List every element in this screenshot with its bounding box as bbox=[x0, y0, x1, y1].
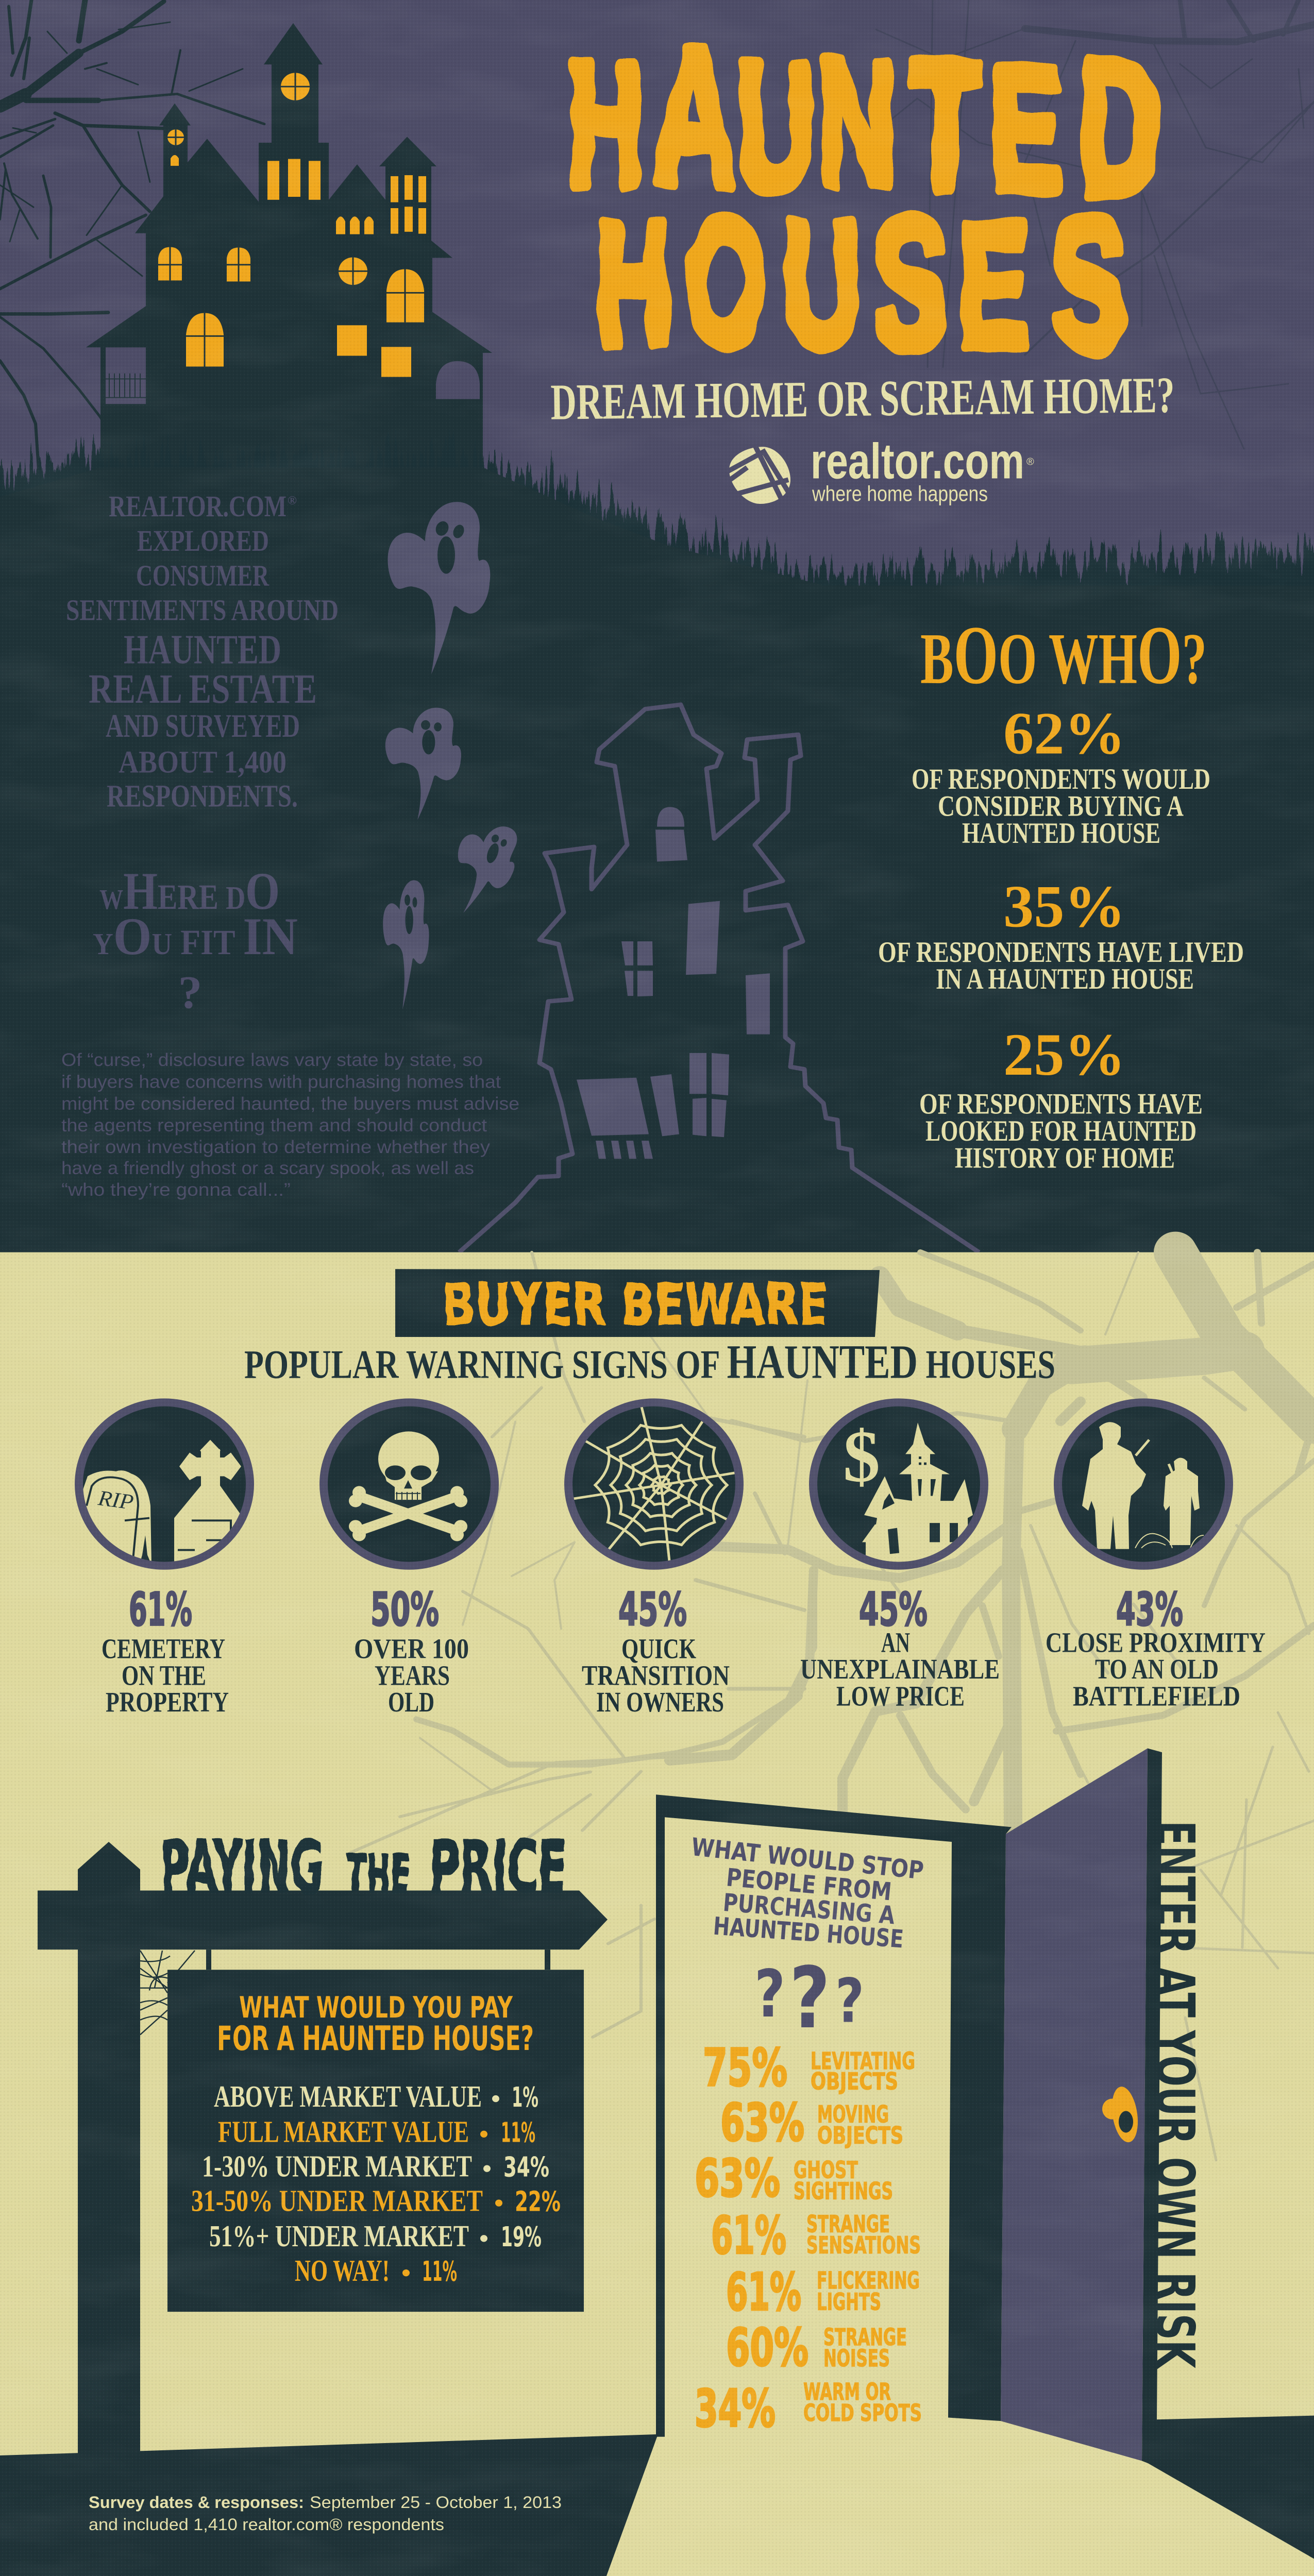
label: an unexplainable low price: UNEXPLAINABLE bbox=[800, 1653, 1000, 1685]
intro text block: HAUNTED bbox=[124, 626, 281, 672]
reason: warm or cold spots: 34% bbox=[695, 2379, 776, 2439]
open door scene bbox=[607, 1749, 1314, 2576]
disclosure paragraph: their own investigation to determine whether they bbox=[61, 1137, 490, 1157]
intro text block: AND SURVEYED bbox=[106, 707, 300, 743]
title: D bbox=[1079, 18, 1161, 234]
reason: strange noises: NOISES bbox=[823, 2345, 890, 2372]
board heading: WHAT WOULD YOU PAY bbox=[239, 1990, 513, 2025]
label: cemetery on the property bbox=[102, 1633, 229, 1718]
realtor.com logo: where home happens bbox=[812, 482, 988, 506]
door knob bbox=[1102, 2085, 1141, 2144]
label: an unexplainable low price bbox=[800, 1626, 1000, 1712]
door leaf bbox=[1001, 1749, 1148, 2461]
question: where do you fit in bbox=[93, 861, 298, 1018]
intro text block: ® bbox=[288, 494, 297, 507]
price option rows: 11% bbox=[422, 2255, 457, 2287]
icon: cemetery: RIP bbox=[96, 1486, 135, 1514]
warning sign: cemetery bbox=[77, 1402, 252, 1718]
stat: 25 percent: LOOKED FOR HAUNTED bbox=[925, 1114, 1197, 1147]
label: cemetery on the property: PROPERTY bbox=[106, 1686, 229, 1718]
reason: strange sensations: STRANGE bbox=[806, 2210, 890, 2238]
stat: 35 percent: IN A HAUNTED HOUSE bbox=[936, 962, 1194, 995]
price option rows: 1-30% UNDER MARKET bbox=[202, 2150, 472, 2183]
question heading bbox=[690, 1833, 925, 1954]
question marks bbox=[754, 1949, 864, 2047]
grassy hill bbox=[0, 457, 1314, 1252]
label: cemetery on the property: ON THE bbox=[122, 1659, 206, 1691]
reason: ghost sightings bbox=[695, 2149, 893, 2209]
reason: flickering lights: FLICKERING bbox=[817, 2267, 920, 2295]
title: E bbox=[991, 29, 1061, 227]
haunted mansion silhouette bbox=[86, 23, 492, 472]
label: over 100 years old: YEARS bbox=[375, 1659, 450, 1691]
price option rows: 34% bbox=[503, 2151, 549, 2183]
title: U bbox=[783, 183, 860, 384]
realtor.com logo: realtor.com bbox=[811, 433, 1024, 489]
footer: survey note: and included 1,410 realtor.com® respondents bbox=[89, 2516, 444, 2534]
stat label: 43 percent: 43% bbox=[1116, 1584, 1183, 1636]
price option rows: 22% bbox=[515, 2185, 561, 2217]
disclosure paragraph: Of “curse,” disclosure laws vary state by state, so bbox=[61, 1049, 483, 1070]
porch openings bbox=[106, 347, 480, 404]
disclosure paragraph: “who they’re gonna call...” bbox=[61, 1179, 291, 1200]
reason: strange sensations: 61% bbox=[711, 2206, 786, 2266]
door frame bbox=[656, 1794, 1012, 2437]
intro text block: RESPONDENTS. bbox=[107, 778, 298, 814]
title: S bbox=[1052, 179, 1126, 389]
reason: flickering lights: LIGHTS bbox=[817, 2288, 881, 2316]
label: close proximity to an old battlefield bbox=[1046, 1626, 1266, 1712]
question marks: ? bbox=[754, 1956, 785, 2032]
real estate sign: paying the price bbox=[38, 1825, 608, 2455]
crooked house windows bbox=[577, 807, 770, 1159]
warning sign: old battlefield bbox=[1046, 1402, 1266, 1712]
realtor.com logo bbox=[727, 433, 1034, 506]
title: S bbox=[873, 179, 948, 389]
icon: dollar sign and house bbox=[813, 1402, 984, 1570]
stat: 62 percent bbox=[912, 700, 1210, 850]
realtor.com logo: ® bbox=[1026, 456, 1034, 467]
question: where do you fit in: YOU FIT IN bbox=[93, 907, 298, 965]
reason: flickering lights bbox=[726, 2262, 920, 2323]
lit windows bbox=[158, 73, 426, 377]
intro text block: REALTOR.COM bbox=[109, 489, 287, 523]
reason: warm or cold spots: WARM OR bbox=[803, 2378, 891, 2406]
icon: cemetery bbox=[77, 1402, 252, 1570]
icon: skull and crossbones bbox=[324, 1402, 495, 1566]
label: an unexplainable low price: AN bbox=[881, 1626, 910, 1658]
disclosure paragraph: have a friendly ghost or a scary spook, as well as bbox=[61, 1158, 474, 1178]
ground left bbox=[0, 2434, 658, 2576]
question: where do you fit in: ? bbox=[178, 967, 202, 1018]
title bbox=[568, 7, 1161, 389]
price option rows: ABOVE MARKET VALUE bbox=[214, 2080, 482, 2114]
reason: ghost sightings: GHOST bbox=[794, 2156, 858, 2184]
question heading: HAUNTED HOUSE bbox=[712, 1912, 904, 1954]
label: quick transition in owners: IN OWNERS bbox=[596, 1686, 724, 1718]
icon: corner cobweb bbox=[140, 1951, 195, 2035]
label: over 100 years old: OVER 100 bbox=[354, 1633, 469, 1665]
heading: paying the price: THE bbox=[346, 1843, 410, 1905]
disclosure paragraph: might be considered haunted, the buyers must advise bbox=[61, 1093, 519, 1114]
heading: paying the price: PAYING bbox=[160, 1825, 324, 1910]
heading: boo who: BOO WHO? bbox=[920, 608, 1207, 701]
reason: flickering lights: 61% bbox=[726, 2262, 801, 2323]
icon: ghost 2 bbox=[385, 708, 461, 820]
price option rows: FULL MARKET VALUE bbox=[218, 2115, 469, 2149]
right ground shadow bbox=[1148, 2416, 1314, 2559]
price option rows bbox=[191, 2080, 561, 2288]
reason: levitating objects: LEVITATING bbox=[811, 2047, 915, 2075]
subheading: popular warning signs: POPULAR WARNING SIGNS OF HAUNTED HOUSES bbox=[244, 1335, 1055, 1388]
title: U bbox=[737, 25, 814, 227]
doorway opening and floor bbox=[607, 1817, 1314, 2576]
label: close proximity to an old battlefield: TO AN OLD bbox=[1095, 1653, 1219, 1685]
disclosure paragraph bbox=[61, 1049, 519, 1200]
question heading: PURCHASING A bbox=[722, 1888, 896, 1930]
label: over 100 years old bbox=[354, 1633, 469, 1718]
panel: boo who statistics bbox=[878, 608, 1244, 1174]
stat: 25 percent: 25% bbox=[1003, 1021, 1125, 1088]
stat label: 45 percent: 45% bbox=[618, 1584, 687, 1636]
footer: survey note bbox=[89, 2494, 562, 2534]
stat label: 50 percent: 50% bbox=[370, 1584, 439, 1636]
price option rows: 31-50% UNDER MARKET bbox=[191, 2184, 483, 2218]
stat: 62 percent: 62% bbox=[1003, 700, 1125, 767]
background: night sky bbox=[0, 0, 1314, 640]
stat: 25 percent bbox=[919, 1021, 1203, 1174]
reason: levitating objects: 75% bbox=[703, 2038, 787, 2098]
icon: spider web bbox=[568, 1402, 739, 1566]
sign post and arrow plank bbox=[38, 1842, 608, 2455]
reason: moving objects: OBJECTS bbox=[817, 2122, 903, 2149]
title: A bbox=[653, 7, 737, 226]
intro text block: REAL ESTATE bbox=[89, 666, 317, 711]
reason: moving objects: MOVING bbox=[817, 2100, 889, 2128]
price option rows: 19% bbox=[501, 2221, 542, 2253]
title: E bbox=[959, 187, 1029, 384]
stat: 25 percent: HISTORY OF HOME bbox=[955, 1142, 1175, 1174]
reason: warm or cold spots bbox=[695, 2378, 922, 2439]
stat: 62 percent: CONSIDER BUYING A bbox=[938, 790, 1184, 822]
intro text block: ABOUT 1,400 bbox=[119, 744, 287, 779]
reason: strange noises: 60% bbox=[726, 2318, 808, 2378]
warning sign: unexplainable low price bbox=[800, 1402, 1000, 1712]
reason: strange noises: STRANGE bbox=[823, 2324, 907, 2351]
question: where do you fit in: WHERE DO bbox=[99, 861, 280, 921]
stat: 62 percent: HAUNTED HOUSE bbox=[962, 817, 1160, 850]
intro text block: CONSUMER bbox=[136, 559, 269, 592]
label: cemetery on the property: CEMETERY bbox=[102, 1633, 225, 1665]
price option rows: NO WAY! bbox=[295, 2254, 390, 2288]
price option rows: 1% bbox=[512, 2081, 538, 2113]
label: over 100 years old: OLD bbox=[388, 1686, 434, 1718]
background: faint tree top right bbox=[850, 0, 1314, 449]
question marks: ? bbox=[835, 1966, 864, 2037]
intro text block bbox=[66, 489, 339, 814]
label: quick transition in owners bbox=[582, 1633, 730, 1718]
warning sign: over 100 years old bbox=[324, 1402, 495, 1718]
sign board bbox=[167, 1970, 584, 2312]
background: large faint tree bbox=[350, 1252, 1314, 2160]
board heading bbox=[217, 1990, 534, 2058]
board heading: FOR A HAUNTED HOUSE? bbox=[217, 2019, 534, 2058]
question heading: WHAT WOULD STOP bbox=[690, 1833, 925, 1885]
footer: survey note: September 25 - October 1, 2013 bbox=[310, 2494, 562, 2512]
reason: ghost sightings: SIGHTINGS bbox=[794, 2177, 893, 2205]
reason: levitating objects: OBJECTS bbox=[811, 2067, 898, 2095]
icon: ghost 4 bbox=[383, 880, 429, 1009]
background: cream lower section bbox=[0, 1252, 1314, 2576]
disclosure paragraph: if buyers have concerns with purchasing homes that bbox=[61, 1072, 501, 1092]
label: an unexplainable low price: LOW PRICE bbox=[836, 1681, 965, 1712]
heading band: buyer beware: BUYER BEWARE bbox=[442, 1272, 828, 1338]
stat: 25 percent: OF RESPONDENTS HAVE bbox=[919, 1088, 1203, 1120]
icon: large ghost bbox=[388, 502, 490, 674]
stat: 62 percent: OF RESPONDENTS WOULD bbox=[912, 762, 1210, 795]
intro text block: SENTIMENTS AROUND bbox=[66, 594, 339, 626]
reason: warm or cold spots: COLD SPOTS bbox=[803, 2399, 922, 2427]
question heading: PEOPLE FROM bbox=[725, 1863, 893, 1906]
title: T bbox=[911, 20, 979, 231]
label: quick transition in owners: QUICK bbox=[621, 1633, 696, 1665]
footer: survey note: Survey dates & responses: bbox=[89, 2494, 304, 2512]
reason: ghost sightings: 63% bbox=[695, 2149, 780, 2209]
panel: what would stop people bbox=[690, 1833, 925, 2439]
icon: ghost 3 bbox=[439, 816, 527, 923]
reason: levitating objects bbox=[703, 2038, 915, 2098]
warning sign: quick transition in owners bbox=[568, 1402, 739, 1718]
title: O bbox=[686, 184, 766, 379]
stat: 35 percent: 35% bbox=[1003, 873, 1125, 940]
question marks: ? bbox=[789, 1949, 830, 2047]
heading: paying the price: PRICE bbox=[429, 1825, 566, 1910]
door edge bbox=[1142, 1749, 1162, 2463]
reasons list bbox=[695, 2038, 922, 2439]
title: H bbox=[568, 26, 643, 221]
price option rows: 51%+ UNDER MARKET bbox=[209, 2219, 469, 2253]
intro text block: EXPLORED bbox=[137, 524, 269, 557]
reason: strange sensations bbox=[711, 2206, 921, 2266]
hanging rods bbox=[206, 1950, 550, 1970]
stat: 35 percent bbox=[878, 873, 1244, 995]
stat label: 45 percent: 45% bbox=[859, 1584, 928, 1636]
label: quick transition in owners: TRANSITION bbox=[582, 1659, 730, 1691]
label: close proximity to an old battlefield: BATTLEFIELD bbox=[1073, 1681, 1240, 1712]
icon: dollar sign and house: $ bbox=[843, 1415, 880, 1497]
crooked house outline bbox=[459, 705, 979, 1252]
disclosure paragraph: the agents representing them and should conduct bbox=[61, 1115, 487, 1136]
background: bare tree top left bbox=[0, 0, 264, 492]
reason: strange sensations: SENSATIONS bbox=[806, 2231, 921, 2259]
stat label: 61 percent: 61% bbox=[129, 1584, 192, 1636]
price option rows: 11% bbox=[501, 2116, 535, 2148]
reason: moving objects: 63% bbox=[720, 2093, 804, 2153]
title: H bbox=[596, 185, 670, 380]
title: N bbox=[819, 23, 895, 221]
icon: logo mark bbox=[727, 445, 790, 504]
vertical text: enter at your own risk: ENTER AT YOUR OWN RISK bbox=[1144, 1821, 1206, 2370]
icon: soldiers bbox=[1058, 1402, 1229, 1566]
